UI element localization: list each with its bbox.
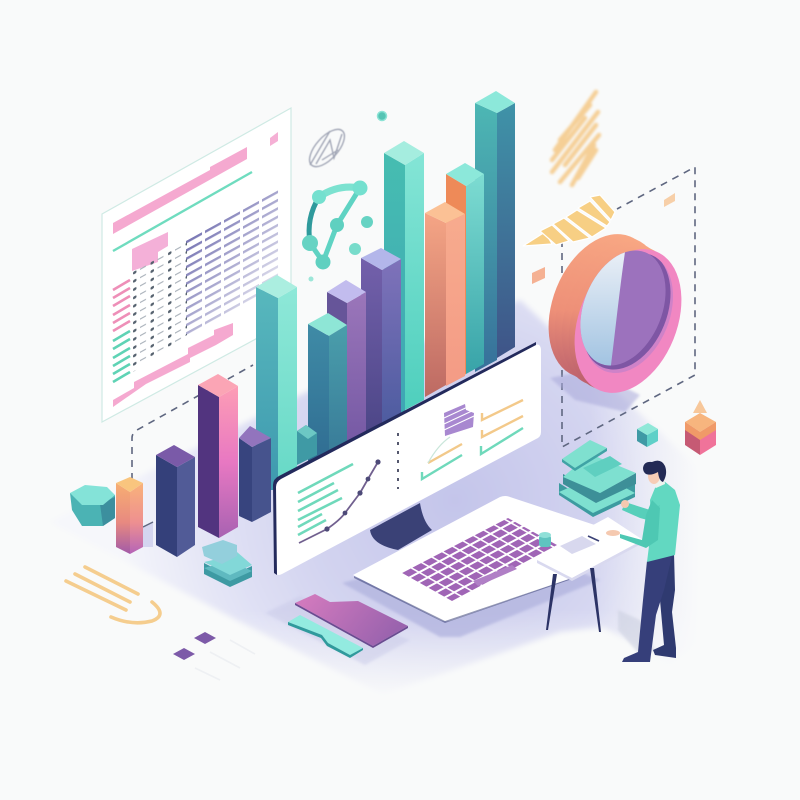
icon: mint cube bbox=[637, 423, 658, 447]
front arm bbox=[620, 500, 660, 548]
bar: small orange bbox=[116, 477, 143, 554]
folder shadow bbox=[265, 596, 410, 665]
person bbox=[606, 461, 680, 662]
small pink square bbox=[270, 132, 278, 146]
bar: dark purple bbox=[239, 426, 271, 522]
keyboard spacebar bbox=[473, 565, 517, 586]
keyboard plate bbox=[353, 496, 640, 623]
icon: small teal stack bbox=[202, 540, 252, 587]
icon: yellow lines and arc bbox=[66, 567, 160, 623]
panel: data table sheet bbox=[102, 108, 291, 422]
green rule bbox=[113, 172, 252, 251]
bar: left mint bbox=[256, 275, 297, 490]
floor plane bbox=[50, 290, 730, 710]
icon: hexagonal teal block bbox=[70, 485, 115, 526]
bar: navy bbox=[156, 445, 195, 557]
bar: pink bbox=[198, 374, 238, 538]
icon: yellow chevron stripes bbox=[523, 195, 615, 246]
icon: circular ring bbox=[548, 234, 682, 393]
monitor green text lines bbox=[298, 464, 353, 535]
icon: purple folder bbox=[295, 594, 408, 648]
torso bbox=[647, 481, 680, 562]
bar: medium purple bbox=[327, 280, 366, 455]
table green row labels bbox=[113, 331, 130, 382]
desk bbox=[537, 517, 643, 632]
bar: tall purple bbox=[361, 248, 401, 436]
pink label box bbox=[132, 232, 168, 271]
monitor small chart lines bbox=[422, 400, 523, 479]
bar: teal with orange side bbox=[446, 163, 484, 385]
desk tablet bbox=[560, 536, 596, 554]
keyboard keys bbox=[402, 518, 557, 601]
monitor stand bbox=[370, 503, 432, 550]
dashed frame: right bbox=[562, 167, 695, 447]
keyboard plate shadow bbox=[342, 540, 600, 637]
person shadow bbox=[618, 610, 655, 655]
bar: orange bbox=[425, 202, 465, 397]
bar: tall mint bbox=[384, 141, 424, 430]
pink footer band bbox=[113, 323, 233, 407]
hair bbox=[643, 461, 666, 482]
desk leg right bbox=[590, 568, 601, 632]
table fade overlay bbox=[186, 186, 280, 340]
table pink row labels bbox=[113, 280, 130, 331]
icon: pink orange cube bbox=[685, 400, 716, 455]
icon: teal strip bbox=[288, 615, 363, 658]
desk pencil bbox=[588, 536, 599, 541]
table dot columns bbox=[133, 238, 187, 372]
icon: purple diamonds bbox=[173, 632, 255, 680]
icon: small light orange diamond bbox=[664, 193, 675, 207]
back leg bbox=[653, 553, 676, 658]
monitor bbox=[273, 342, 541, 575]
monitor line chart bbox=[299, 459, 381, 543]
bar: medium teal bbox=[308, 313, 347, 470]
face bbox=[648, 468, 660, 484]
icon: scribble bbox=[552, 92, 599, 185]
icon: teal stack bbox=[559, 440, 636, 517]
dashed frame: left bbox=[132, 365, 253, 480]
monitor purple text block bbox=[444, 404, 474, 436]
ring inner bowl bbox=[586, 254, 673, 373]
ring floor shadow bbox=[550, 370, 640, 412]
desk leg left bbox=[546, 574, 557, 630]
neck bbox=[652, 476, 665, 488]
ring glass and purple halves bbox=[580, 250, 666, 366]
icon: mint node network bbox=[302, 180, 373, 282]
front leg bbox=[622, 556, 672, 662]
icon: small orange diamond bbox=[532, 267, 545, 284]
icon: small mint dot bbox=[378, 112, 386, 120]
bar: tall teal right bbox=[475, 91, 515, 372]
monitor dotted divider bbox=[397, 433, 399, 489]
table purple columns bbox=[186, 186, 280, 336]
icon: cup bbox=[539, 532, 551, 547]
back arm bbox=[622, 502, 660, 522]
icon: pencil sketch bbox=[303, 124, 351, 172]
pink header band bbox=[113, 147, 247, 234]
small teal block behind monitor bbox=[297, 425, 317, 465]
lavender slab behind small bars bbox=[143, 522, 153, 547]
hands bbox=[621, 500, 629, 508]
illustration: isometric data analytics workspace bbox=[64, 88, 716, 680]
